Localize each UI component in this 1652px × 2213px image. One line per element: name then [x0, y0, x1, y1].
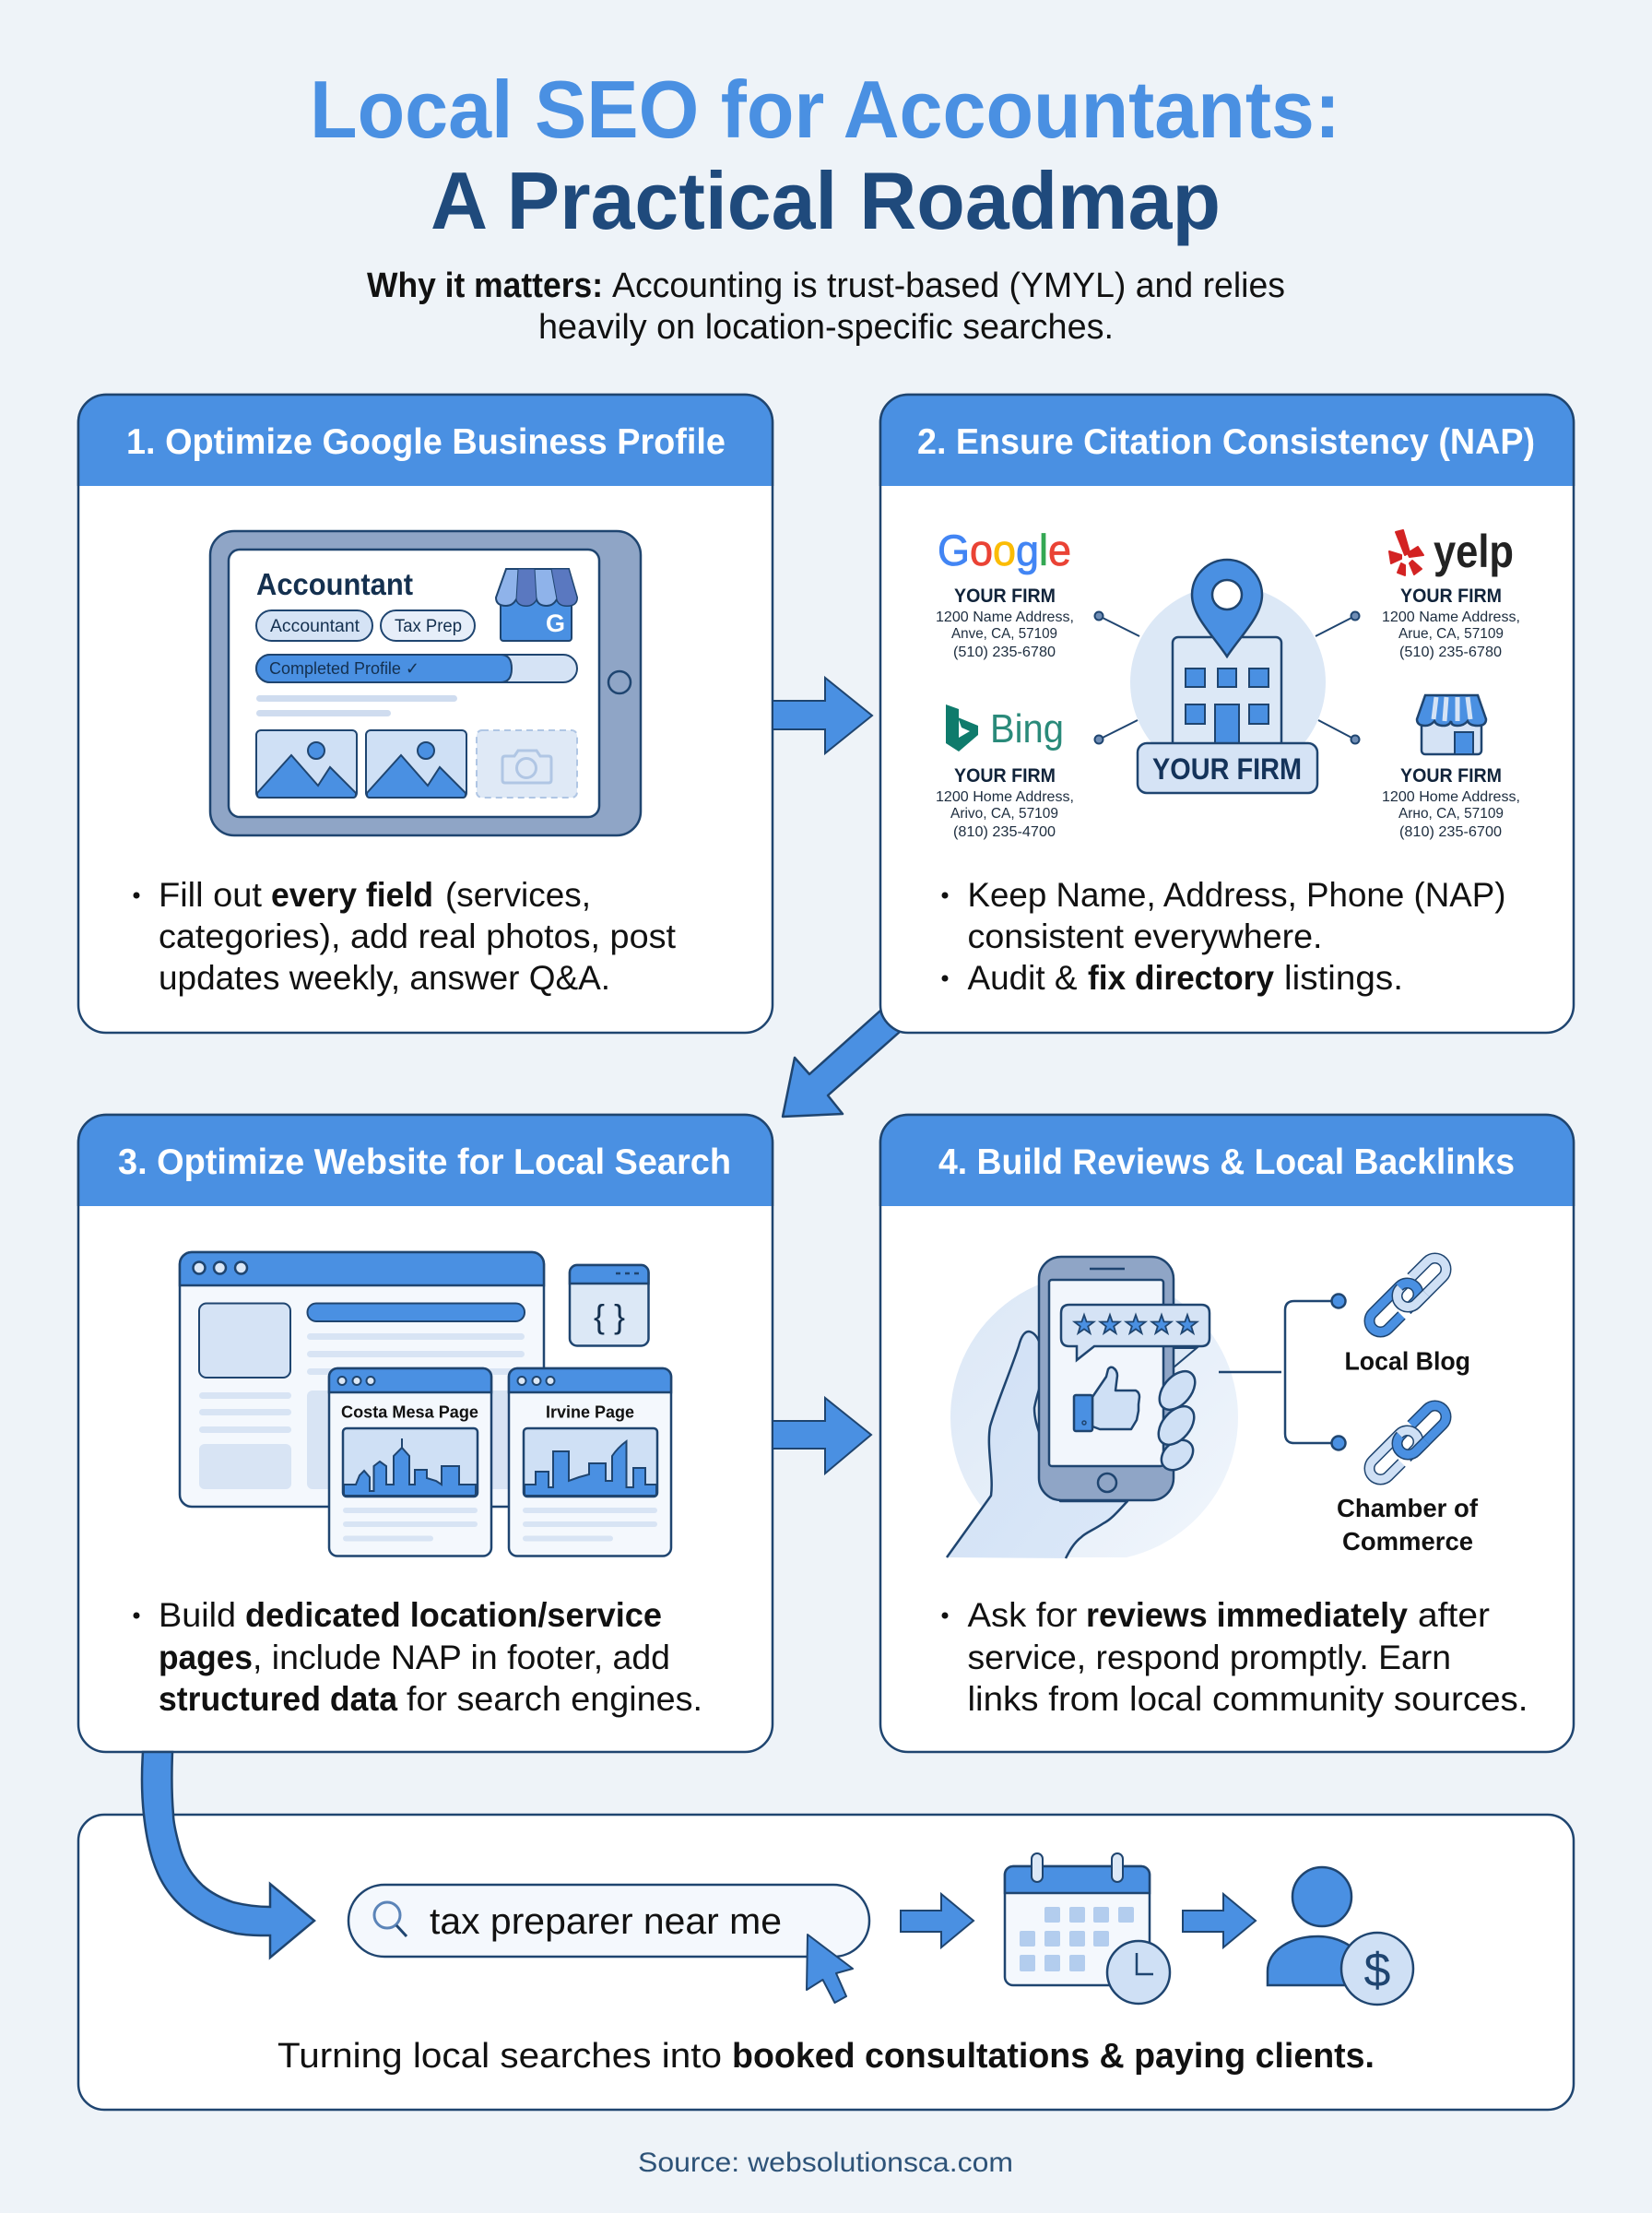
listing: Bing: 1200 Home Address,	[936, 789, 1074, 805]
arrow: search to booking	[901, 1894, 974, 1947]
listing: Bing: Arivo, CA, 57109	[950, 806, 1058, 822]
logo: Bing	[946, 704, 1064, 751]
text: outcome statement: Turning local searches into	[277, 2037, 722, 2076]
title	[310, 64, 1340, 246]
icon: Irvine page: Irvine Page	[546, 1403, 634, 1422]
listing: Yelp: Arue, CA, 57109	[1398, 626, 1504, 642]
icon: tablet with business profile: Accountant	[270, 617, 360, 636]
icon: photo 2	[366, 730, 466, 798]
source line: Source: websolutionsca.com	[638, 2148, 1013, 2178]
panel: step 1 Google Business Profile	[78, 395, 773, 1033]
subtitle: why it matters: Accounting is trust-based (YMYL) and relies	[612, 266, 1285, 305]
listing: Google: 1200 Name Address,	[936, 609, 1074, 625]
icon: Irvine page	[509, 1368, 671, 1556]
subtitle: why it matters	[367, 266, 1285, 347]
listing: Google: Anve, CA, 57109	[951, 626, 1057, 642]
connector: phone to backlinks	[1219, 1295, 1346, 1450]
listing: Yelp: (510) 235-6780	[1399, 645, 1502, 660]
icon: main browser window	[180, 1252, 544, 1507]
sign: your firm	[1138, 743, 1317, 793]
subtitle: why it matters: Why it matters:	[367, 266, 603, 305]
icon: client with dollar coin: $	[1364, 1944, 1391, 1997]
icon: tablet with business profile: Tax Prep	[395, 617, 462, 636]
text: step 1 bullet	[133, 876, 677, 997]
icon: hand holding phone with review	[947, 1257, 1238, 1558]
icon: calendar with clock	[1005, 1853, 1170, 2004]
text: step 3 bullet: , include NAP in footer, add	[253, 1639, 670, 1676]
icon: client with dollar coin	[1268, 1867, 1413, 2005]
search bar: tax preparer near me	[430, 1901, 782, 1942]
icon: tablet with business profile	[210, 531, 641, 835]
text: step 3 bullet: pages	[159, 1639, 253, 1676]
icon: chain link local blog	[1365, 1248, 1450, 1343]
title: A Practical Roadmap	[431, 155, 1221, 246]
text: step 4 bullet: after	[1418, 1596, 1490, 1634]
progress bar: completed profile: Completed Profile ✓	[269, 659, 419, 678]
heading: step 2: 2. Ensure Citation Consistency (NAP)	[917, 422, 1535, 462]
logo: Google: Google	[938, 526, 1071, 574]
text: step 2 bullets: listings.	[1284, 959, 1403, 997]
heading: step 1: 1. Optimize Google Business Profile	[126, 422, 726, 462]
icon: storefront G	[496, 569, 577, 641]
logo: Bing: Bing	[990, 706, 1064, 751]
listing: Google	[936, 586, 1074, 660]
arrow: step 2 to step 3	[783, 1011, 900, 1117]
listing: Bing: YOUR FIRM	[954, 765, 1056, 787]
panel: step 2 Citation Consistency	[880, 395, 1574, 1033]
label: local blog: Local Blog	[1344, 1346, 1470, 1376]
panel: step 3 Website	[78, 1115, 773, 1752]
icon: fingers	[1151, 1365, 1202, 1476]
text: step 3 bullet: Build	[159, 1596, 236, 1634]
arrow: step 3 to step 4	[773, 1398, 871, 1473]
label: chamber of commerce: Chamber of	[1337, 1494, 1479, 1522]
listing: Google: (510) 235-6780	[953, 645, 1056, 660]
text: step 4 bullet	[942, 1596, 1528, 1718]
icon: thumbs up	[1074, 1367, 1139, 1431]
text: step 1 bullet: every field	[271, 876, 433, 914]
label: chamber of commerce: Commerce	[1342, 1527, 1473, 1556]
icon: chain link chamber of commerce	[1365, 1395, 1450, 1490]
icon: store	[1417, 695, 1486, 754]
listing: Google: YOUR FIRM	[954, 586, 1056, 607]
icon: photo 1	[256, 730, 357, 798]
text: step 2 bullets: Keep Name, Address, Phone (NAP)	[968, 876, 1506, 914]
subtitle: why it matters: heavily on location-specific searches.	[538, 308, 1114, 347]
text: step 2 bullets	[942, 876, 1506, 997]
panel: step 4 Reviews and Backlinks	[880, 1115, 1574, 1752]
text: step 2 bullets: fix directory	[1088, 959, 1274, 997]
text: step 2 bullets: Audit &	[968, 959, 1078, 997]
sign: your firm: YOUR FIRM	[1152, 752, 1302, 786]
listing: Bing: (810) 235-4700	[953, 824, 1056, 840]
listing: Bing	[936, 765, 1074, 840]
arrow: step 3 to outcome	[142, 1752, 314, 1958]
text: step 1 bullet: Fill out	[159, 876, 263, 914]
connectors to directories	[1095, 612, 1359, 743]
text: step 2 bullets: consistent everywhere.	[968, 917, 1322, 955]
text: step 4 bullet: service, respond promptly. Earn	[968, 1639, 1451, 1676]
icon: cursor	[807, 1935, 853, 2003]
icon: structured data code window: { }	[594, 1297, 625, 1335]
text: step 4 bullet: Ask for	[968, 1596, 1077, 1634]
listing: store: Arно, CA, 57109	[1398, 806, 1504, 822]
listing: store: YOUR FIRM	[1400, 765, 1502, 787]
text: outcome statement: booked consultations & paying clients.	[732, 2037, 1375, 2076]
progress bar: completed profile	[256, 655, 577, 682]
text: step 1 bullet: categories), add real photos, post	[159, 917, 677, 955]
icon: tablet with business profile: Accountant	[256, 567, 413, 601]
icon: structured data code window	[570, 1265, 649, 1346]
arrow: step 1 to step 2	[773, 678, 872, 753]
title: Local SEO for Accountants:	[310, 64, 1340, 155]
text: step 1 bullet: (services,	[445, 876, 591, 914]
arrow: booking to client	[1183, 1894, 1256, 1947]
icon: central building with map pin	[1130, 560, 1326, 793]
text: step 4 bullet: reviews immediately	[1086, 1596, 1408, 1634]
label: chamber of commerce	[1337, 1494, 1479, 1556]
text: step 3 bullet: structured data	[159, 1680, 397, 1718]
icon: review stars bubble	[1061, 1305, 1210, 1360]
icon: Costa Mesa page	[329, 1368, 491, 1556]
listing: Yelp	[1382, 586, 1520, 660]
heading: step 3: 3. Optimize Website for Local Search	[118, 1142, 731, 1182]
search bar	[348, 1885, 869, 1957]
icon: photo placeholder camera	[477, 730, 577, 798]
listing: Yelp: YOUR FIRM	[1400, 586, 1502, 607]
logo: Yelp: yelp	[1434, 526, 1514, 577]
panel: outcome	[78, 1752, 1574, 2110]
heading: step 4: 4. Build Reviews & Local Backlinks	[938, 1142, 1515, 1182]
text: step 4 bullet: links from local community sources.	[968, 1680, 1528, 1718]
listing: Yelp: 1200 Name Address,	[1382, 609, 1520, 625]
listing: store: (810) 235-6700	[1399, 824, 1502, 840]
text: step 3 bullet	[133, 1596, 702, 1718]
text: step 3 bullet: dedicated location/service	[245, 1596, 662, 1634]
text: step 1 bullet: updates weekly, answer Q&A.	[159, 959, 610, 997]
logo: Yelp	[1389, 526, 1514, 577]
text: step 3 bullet: for search engines.	[407, 1680, 702, 1718]
icon: Costa Mesa page: Costa Mesa Page	[341, 1403, 478, 1422]
icon: storefront G: G	[546, 609, 565, 637]
listing: store	[1382, 765, 1520, 840]
listing: store: 1200 Home Address,	[1382, 789, 1520, 805]
